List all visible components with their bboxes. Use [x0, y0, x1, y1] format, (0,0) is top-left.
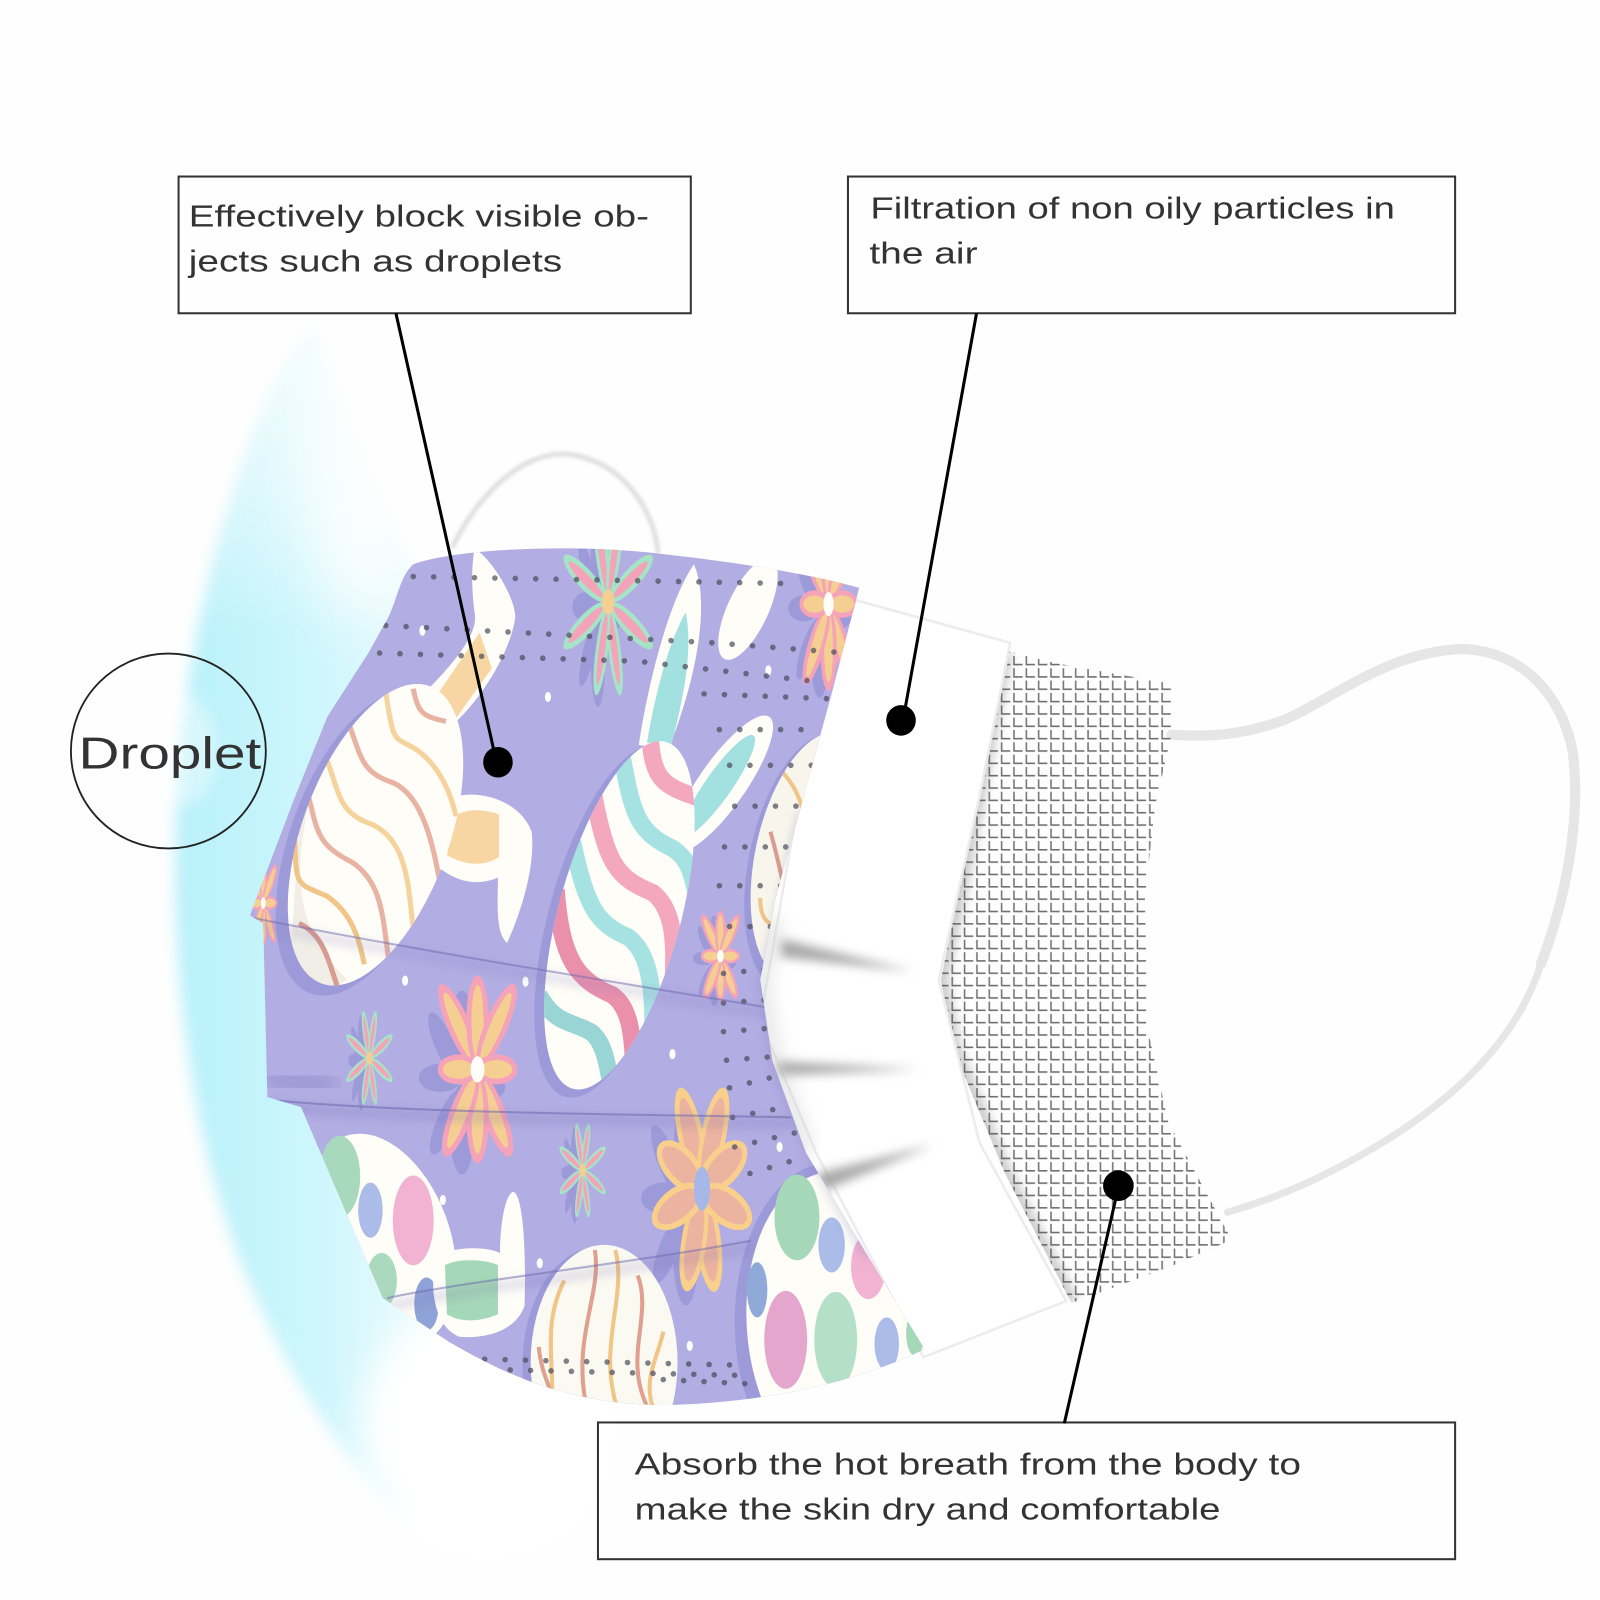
pleat shadows	[778, 939, 934, 1192]
flower: small green pink lower	[558, 1122, 607, 1223]
ear loop: right	[1171, 649, 1575, 1212]
egg: striped bottom	[530, 1244, 678, 1405]
egg: partial right, clipped by white layer	[750, 735, 820, 962]
callout box: filtration: Filtration of non oily particles in	[870, 191, 1395, 225]
egg shadows	[240, 666, 929, 1484]
rabbit ear: lower green	[433, 1192, 525, 1337]
callout box: block droplets: Effectively block visible ob-	[189, 200, 649, 234]
printed front layer	[250, 548, 924, 1406]
callout box: absorb breath	[598, 1422, 1455, 1559]
inner mesh layer	[934, 643, 1240, 1316]
leader line: inner layer	[1064, 1170, 1134, 1423]
callout box: block droplets	[179, 177, 691, 313]
flower: large pink orange	[419, 976, 524, 1175]
callout box: filtration: the air	[869, 236, 978, 270]
callout box: filtration	[848, 177, 1455, 313]
leader line: outer layer	[396, 313, 513, 778]
rabbit ear: left upper	[430, 552, 516, 720]
droplet label circle: Droplet	[79, 727, 262, 778]
flower: green pink top	[563, 548, 653, 706]
egg: spotted left	[322, 1134, 454, 1333]
rabbit ear: left lower	[439, 795, 532, 943]
callout box: block droplets: jects such as droplets	[188, 244, 562, 278]
flower: small left edge	[252, 864, 278, 946]
leader line: filter layer	[886, 313, 977, 736]
droplet label circle	[71, 654, 266, 848]
rabbit ear: side teal	[692, 716, 773, 847]
rabbit ear: top right	[718, 566, 778, 660]
callout box: absorb breath: make the skin dry and comfortable	[635, 1492, 1220, 1526]
callout box: absorb breath: Absorb the hot breath from the body to	[635, 1447, 1301, 1481]
ear loop: top	[452, 454, 658, 553]
egg: wavy pink and teal	[544, 741, 695, 1090]
egg: spotted right	[746, 1174, 924, 1397]
droplet spray: pale blue crescent	[147, 296, 617, 1561]
fold shadows on pleats	[250, 816, 867, 1306]
perforation dots	[380, 577, 847, 1384]
flower: pink orange top right	[788, 574, 856, 698]
flower: small pink orange	[693, 910, 744, 1006]
white filter layer with pleats	[760, 600, 1066, 1357]
flower: small green pink middle	[345, 1010, 394, 1111]
egg: wavy orange and rose	[288, 684, 464, 986]
rabbit ear: long teal	[639, 564, 701, 750]
flower: large orange salmon	[641, 1084, 759, 1305]
small white specks	[402, 626, 783, 1351]
